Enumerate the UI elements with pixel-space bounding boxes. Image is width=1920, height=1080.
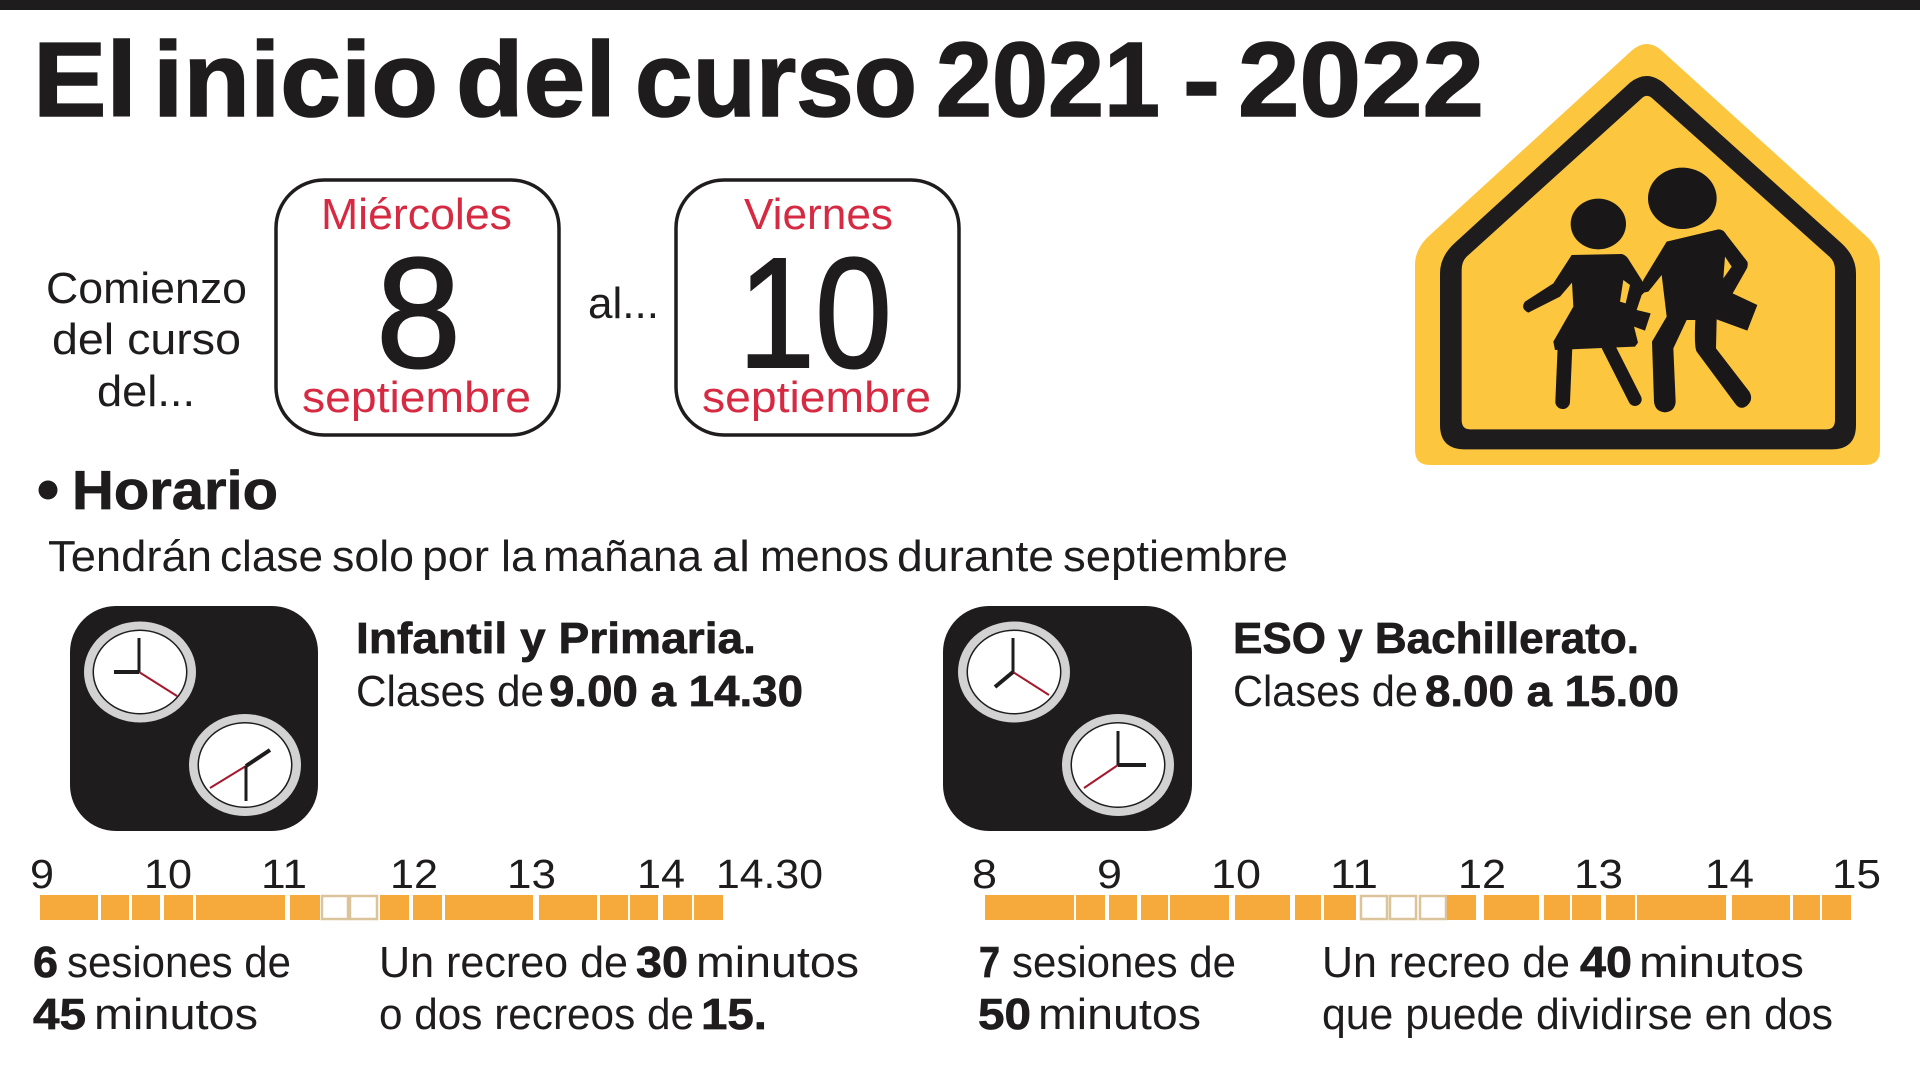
- timeline labels: eso y bachillerato: 12: [1458, 851, 1506, 897]
- title: -: [1183, 21, 1220, 139]
- timeline labels: infantil y primaria: 14.30: [716, 851, 823, 897]
- text: horario subtitle: al: [712, 532, 750, 581]
- text: break eso y bachillerato: 40: [1580, 938, 1632, 987]
- text: infantil y primaria hours: Clases de: [356, 667, 544, 716]
- text: break infantil y primaria: minutos: [696, 938, 859, 987]
- text: sessions eso y bachillerato: 50: [978, 990, 1031, 1039]
- text: horario subtitle: [48, 532, 1288, 581]
- text: comienzo del curso: del curso: [52, 315, 241, 364]
- timeline labels: infantil y primaria: 12: [390, 851, 438, 897]
- timeline labels: infantil y primaria: 10: [144, 851, 192, 897]
- timeline bar: infantil y primaria: [40, 895, 723, 920]
- text: sessions infantil y primaria: minutos: [94, 990, 258, 1039]
- timeline labels: eso y bachillerato: 15: [1832, 851, 1881, 897]
- timeline labels: eso y bachillerato: 11: [1330, 851, 1378, 897]
- text: horario subtitle: Tendrán: [48, 532, 212, 581]
- title: curso: [635, 21, 917, 139]
- text: break infantil y primaria: Un recreo de: [379, 938, 628, 987]
- date card: Wednesday 8 September: [276, 180, 559, 435]
- panel: infantil y primaria: [30, 606, 859, 1039]
- title: El: [33, 21, 137, 139]
- timeline labels: infantil y primaria: [30, 851, 823, 897]
- text: break infantil y primaria: o dos recreos de: [379, 990, 694, 1039]
- title: inicio: [153, 21, 438, 139]
- text: break eso y bachillerato: Un recreo de: [1322, 938, 1570, 987]
- text: sessions infantil y primaria: 6: [33, 938, 58, 987]
- text: horario subtitle: durante: [897, 532, 1054, 581]
- timeline labels: infantil y primaria: 11: [261, 851, 307, 897]
- timeline labels: eso y bachillerato: [972, 851, 1881, 897]
- text: horario subtitle: mañana: [543, 532, 703, 581]
- heading: horario: Horario: [72, 459, 278, 521]
- text: comienzo del curso: del...: [97, 367, 195, 416]
- text: sessions eso y bachillerato: sesiones de: [1012, 938, 1236, 987]
- date card: Friday 10 September: Viernes: [744, 190, 893, 239]
- text: break infantil y primaria: [379, 938, 859, 1039]
- date card: Friday 10 September: 10: [738, 226, 892, 401]
- date card: Wednesday 8 September: Miércoles: [321, 190, 512, 239]
- timeline bar: eso y bachillerato: [985, 895, 1851, 920]
- text: break eso y bachillerato: [1322, 938, 1833, 1039]
- text: horario subtitle: por: [422, 532, 489, 581]
- icon: school crossing sign: [1415, 44, 1880, 465]
- panel: eso y bachillerato: [943, 606, 1881, 1039]
- text: eso y bachillerato hours: 8.00 a 15.00: [1425, 667, 1679, 716]
- text: sessions infantil y primaria: [33, 938, 291, 1039]
- icon: clocks eso y bachillerato: [943, 606, 1192, 831]
- text: comienzo del curso: Comienzo: [46, 264, 247, 313]
- text: horario subtitle: menos: [760, 532, 889, 581]
- text: al: al...: [588, 279, 659, 328]
- text: sessions eso y bachillerato: [978, 938, 1236, 1039]
- timeline labels: eso y bachillerato: 9: [1097, 851, 1122, 897]
- text: break infantil y primaria: 15.: [701, 990, 767, 1039]
- text: infantil y primaria hours: 9.00 a 14.30: [549, 667, 803, 716]
- text: break infantil y primaria: 30: [636, 938, 688, 987]
- text: infantil y primaria hours: Infantil y Primaria.: [356, 614, 756, 663]
- date card: Wednesday 8 September: septiembre: [302, 373, 531, 422]
- title: 2021: [936, 21, 1160, 139]
- icon: clocks infantil y primaria: [70, 606, 318, 831]
- text: horario subtitle: la: [501, 532, 537, 581]
- text: eso y bachillerato hours: ESO y Bachillerato.: [1233, 614, 1639, 663]
- date card: Wednesday 8 September: 8: [376, 226, 461, 401]
- text: sessions infantil y primaria: 45: [33, 990, 86, 1039]
- text: sessions infantil y primaria: sesiones de: [67, 938, 291, 987]
- title: del: [456, 21, 616, 139]
- panel: course start dates: [46, 180, 959, 435]
- date card: Friday 10 September: [676, 180, 959, 435]
- title: 2022: [1238, 21, 1484, 139]
- timeline labels: eso y bachillerato: 8: [972, 851, 997, 897]
- text: sessions eso y bachillerato: 7: [979, 938, 1000, 987]
- timeline labels: infantil y primaria: 14: [637, 851, 685, 897]
- date card: Friday 10 September: septiembre: [702, 373, 931, 422]
- text: break eso y bachillerato: minutos: [1639, 938, 1804, 987]
- timeline labels: infantil y primaria: 13: [507, 851, 556, 897]
- timeline labels: eso y bachillerato: 10: [1211, 851, 1261, 897]
- text: horario subtitle: septiembre: [1063, 532, 1288, 581]
- text: eso y bachillerato hours: [1233, 614, 1679, 716]
- text: break eso y bachillerato: que puede dividirse en dos: [1322, 990, 1833, 1039]
- text: eso y bachillerato hours: Clases de: [1233, 667, 1418, 716]
- title: [33, 21, 1484, 139]
- timeline labels: eso y bachillerato: 13: [1574, 851, 1623, 897]
- timeline labels: infantil y primaria: 9: [30, 851, 54, 897]
- text: comienzo del curso: [46, 264, 247, 416]
- text: infantil y primaria hours: [356, 614, 803, 716]
- text: horario subtitle: clase: [220, 532, 323, 581]
- timeline labels: eso y bachillerato: 14: [1705, 851, 1754, 897]
- text: horario subtitle: solo: [332, 532, 414, 581]
- icon: boy figure: [1640, 168, 1757, 412]
- icon: girl figure: [1523, 199, 1652, 402]
- text: sessions eso y bachillerato: minutos: [1038, 990, 1201, 1039]
